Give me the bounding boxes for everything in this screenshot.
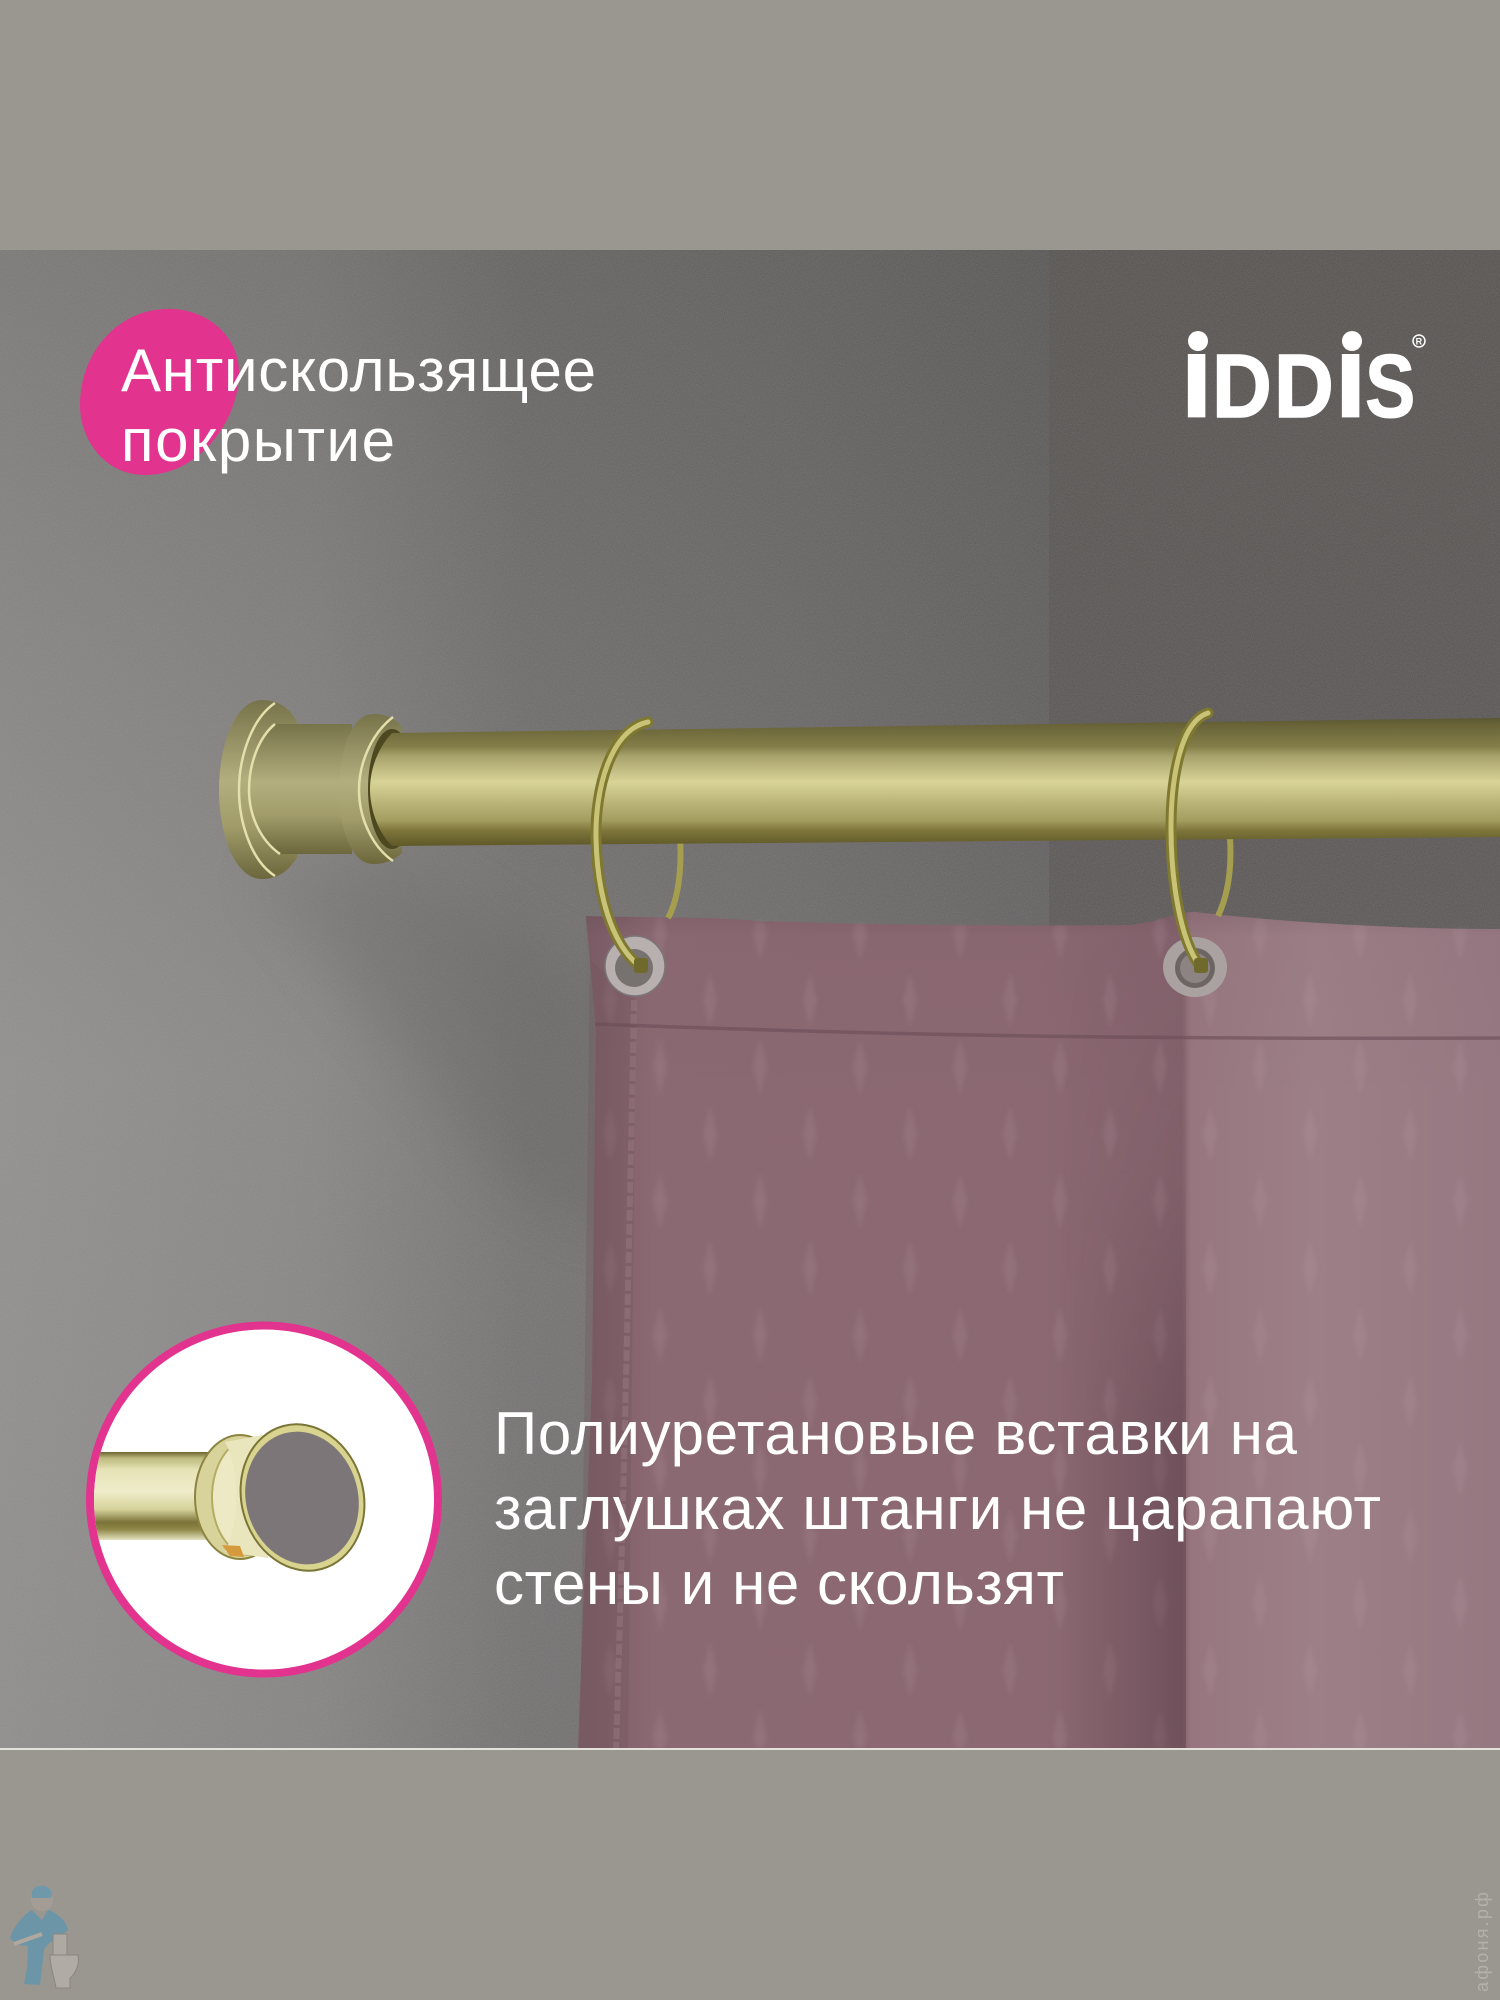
flange: [219, 700, 297, 879]
inset collar neck: [225, 1434, 268, 1558]
top band: [0, 0, 1500, 250]
logo: IDDIS: [1188, 331, 1426, 418]
inset rod: [90, 1452, 215, 1540]
heading: покрытие: [121, 407, 395, 474]
heading: Антискользящее: [121, 337, 596, 404]
shower rod: [370, 718, 1500, 846]
inset collar: [194, 1434, 256, 1560]
curtain ring right clasp: [1194, 958, 1208, 973]
side hem of curtain: [580, 960, 636, 1748]
bottom divider line: [0, 1748, 1500, 1750]
curtain ring right: [1171, 713, 1208, 966]
curtain ring left clasp: [634, 958, 648, 973]
logo: IDDIS: R: [1416, 336, 1423, 346]
logo: IDDIS: S: [1365, 336, 1415, 436]
body text: [494, 1400, 1381, 1617]
heading: [121, 337, 596, 474]
inset collar reflection: [222, 1545, 244, 1557]
inset end cap rim: [240, 1423, 366, 1572]
pink accent blob: [80, 309, 239, 475]
grommet left: [605, 936, 665, 996]
shadow of rod bracket on wall: [250, 860, 620, 1240]
wall bracket: [219, 700, 416, 879]
body text: стены и не скользят: [494, 1550, 1064, 1617]
logo: IDDIS: i: [1334, 309, 1367, 443]
photo: bathroom wall: [0, 250, 1500, 1748]
watermark: site name: афоня.рф: [1472, 1892, 1492, 1992]
shower curtain: [578, 912, 1500, 1748]
body text: заглушках штанги не царапают: [494, 1475, 1381, 1542]
inset grey insert: [245, 1432, 359, 1564]
hem stitching: [616, 1000, 634, 1748]
curtain fold shadow: [1102, 1218, 1186, 1748]
inset circle: rod end cap: [90, 1326, 438, 1674]
collar: [339, 714, 402, 864]
logo: IDDIS: D: [1274, 337, 1334, 437]
cylinder: [249, 724, 352, 854]
grommet right: [1163, 937, 1227, 997]
curtain ring left: [596, 722, 648, 968]
logo: IDDIS: i: [1180, 309, 1213, 443]
back of curtain rings: [668, 838, 1230, 918]
horizontal stitch line: [595, 1024, 1500, 1038]
logo: IDDIS: D: [1212, 337, 1272, 437]
bottom band: [0, 1750, 1500, 2000]
watermark: plumber icon: [10, 1886, 78, 1988]
body text: Полиуретановые вставки на: [494, 1400, 1298, 1467]
